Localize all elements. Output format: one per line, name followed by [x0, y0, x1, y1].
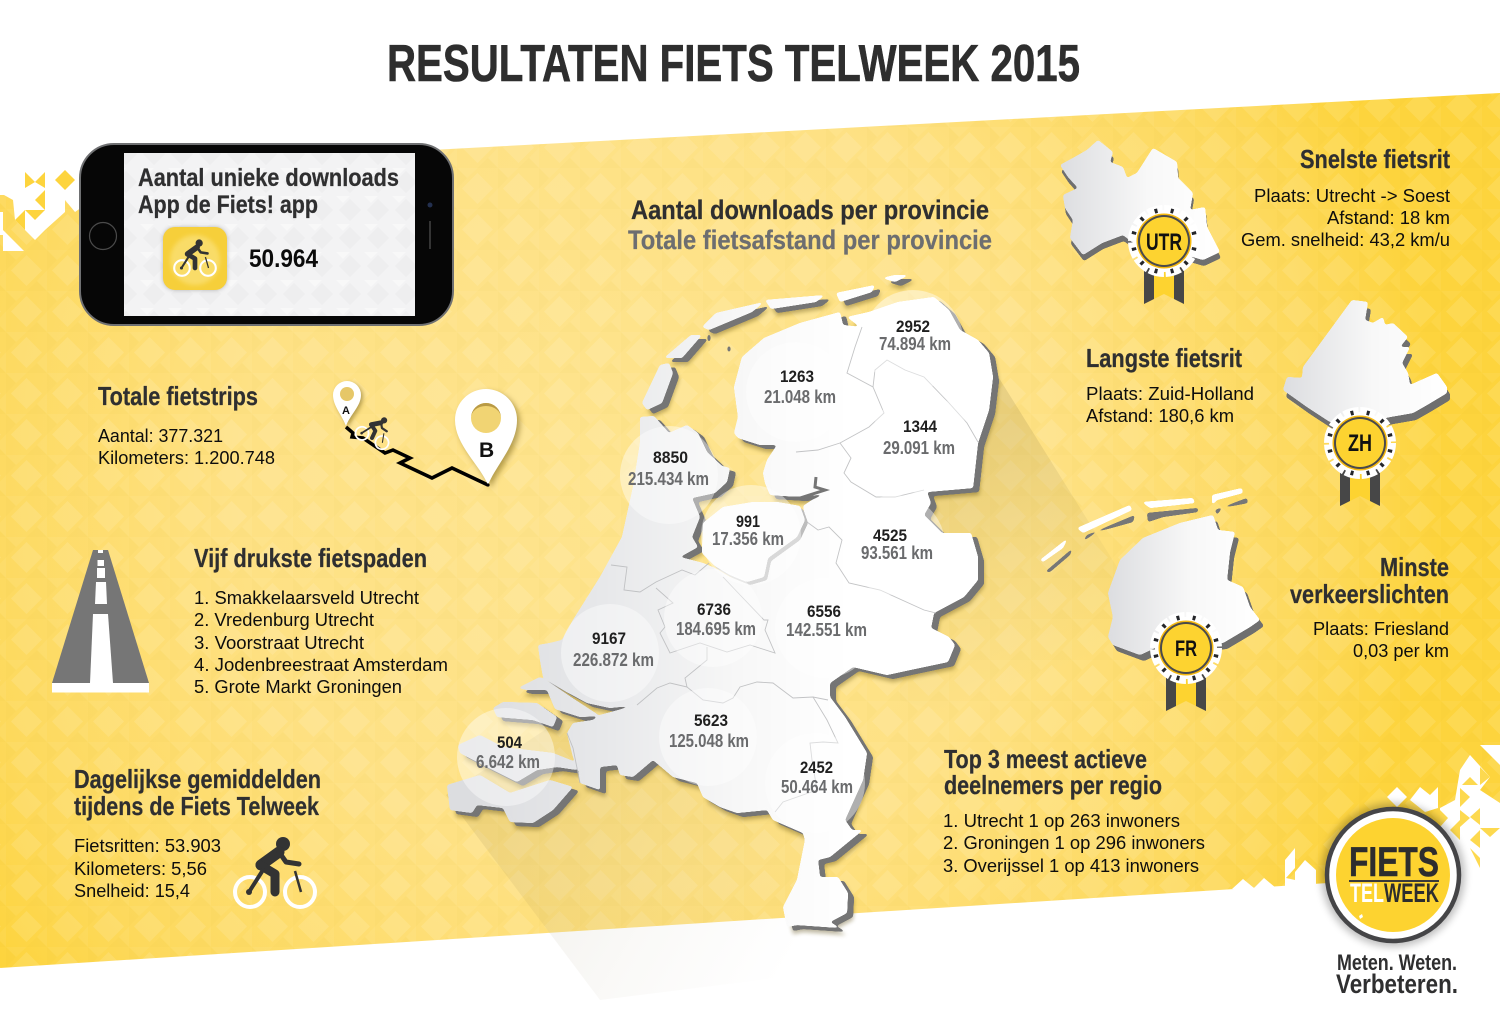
daily averages: Kilometers: 5,56	[74, 859, 207, 879]
phone screen	[124, 153, 415, 316]
route cyclist	[353, 409, 398, 451]
label: Friesland	[764, 367, 836, 407]
busiest cycle paths	[194, 543, 448, 697]
label: Overijssel: 93.561 km	[861, 543, 933, 563]
label: Gelderland: 6556	[807, 602, 841, 621]
map heading: Aantal downloads per provincie	[631, 195, 989, 225]
busiest cycle paths: Vijf drukste fietspaden	[194, 543, 427, 573]
route line	[346, 427, 488, 485]
province borders	[567, 327, 978, 812]
top 3 regions: deelnemers per regio	[944, 770, 1162, 800]
label: Flevoland	[712, 512, 784, 549]
label: Zuid-Holland: 9167	[592, 629, 626, 648]
Utrecht province with rosette: UTR	[1146, 229, 1182, 256]
label: Overijssel	[861, 526, 933, 563]
Zuid-Holland province with rosette	[1283, 300, 1450, 506]
Zuid-Holland province with rosette: ZH	[1348, 430, 1372, 457]
total trips text: Totale fietstrips	[98, 381, 258, 411]
daily averages	[74, 764, 321, 901]
label: Zeeland	[476, 733, 540, 772]
daily averages: Snelheid: 15,4	[74, 881, 190, 901]
pin A: A	[342, 405, 350, 417]
label: Zuid-Holland: 226.872 km	[573, 650, 654, 670]
Friesland province with rosette: FR	[1175, 636, 1197, 661]
label: Noord-Holland	[628, 448, 709, 489]
total trips text	[98, 381, 275, 468]
tagline	[1336, 950, 1458, 999]
label: Gelderland: 142.551 km	[786, 620, 867, 640]
phone panel	[80, 144, 453, 325]
daily averages: Dagelijkse gemiddelden	[74, 764, 321, 794]
map heading	[628, 195, 992, 255]
Fiets Telweek logo	[1321, 803, 1465, 947]
pin B: B	[479, 439, 494, 462]
label: Noord-Brabant: 5623	[694, 711, 728, 730]
top 3 regions: 2. Groningen 1 op 296 inwoners	[943, 833, 1205, 853]
longest ride text: Langste fietsrit	[1086, 343, 1242, 373]
label: Limburg: 50.464 km	[781, 777, 853, 797]
Fiets Telweek logo: FIETS	[1349, 838, 1439, 885]
home button	[90, 222, 116, 250]
icon: cyclist	[235, 837, 315, 907]
pin A	[333, 381, 361, 426]
downloads heading: App de Fiets! app	[138, 191, 318, 219]
triangle decoration left	[0, 165, 85, 251]
label: Zuid-Holland	[573, 629, 654, 670]
fastest ride text: Gem. snelheid: 43,2 km/u	[1241, 230, 1450, 250]
label: Utrecht	[676, 600, 756, 639]
app icon	[163, 227, 227, 290]
top 3 regions: Top 3 meest actieve	[944, 744, 1147, 774]
long map shadow	[446, 370, 1125, 1000]
map heading: Totale fietsafstand per provincie	[628, 225, 992, 255]
label: Noord-Holland: 215.434 km	[628, 469, 709, 489]
label: Drenthe: 1344	[903, 417, 937, 436]
label: Flevoland: 991	[736, 512, 760, 531]
label: Groningen	[879, 317, 951, 354]
road icon	[52, 550, 149, 692]
longest ride text	[1086, 343, 1254, 426]
fastest ride text: Afstand: 18 km	[1327, 208, 1450, 228]
tagline: Meten. Weten.	[1337, 950, 1457, 975]
label: Noord-Brabant: 125.048 km	[669, 731, 749, 751]
least traffic lights text: Plaats: Friesland	[1313, 619, 1449, 639]
triangle decoration bottom right	[1232, 745, 1500, 900]
label: Friesland: 1263	[780, 367, 814, 386]
least traffic lights text	[1290, 552, 1449, 661]
label: Drenthe: 29.091 km	[883, 438, 955, 458]
Utrecht province with rosette	[1060, 140, 1221, 304]
label: Limburg: 2452	[800, 758, 833, 777]
label: Utrecht: 6736	[697, 600, 731, 619]
label: Gelderland	[786, 602, 867, 640]
daily averages: Fietsritten: 53.903	[74, 836, 221, 856]
fastest ride text: Snelste fietsrit	[1300, 144, 1450, 174]
label: Utrecht: 184.695 km	[676, 619, 756, 639]
label: Drenthe	[883, 417, 955, 458]
longest ride text: Plaats: Zuid-Holland	[1086, 384, 1254, 404]
label: Groningen: 74.894 km	[879, 334, 951, 354]
title: RESULTATEN FIETS TELWEEK 2015	[387, 35, 1080, 93]
phone body	[80, 144, 453, 325]
label: Limburg	[781, 758, 853, 797]
busiest cycle paths: 4. Jodenbreestraat Amsterdam	[194, 655, 448, 675]
least traffic lights text: 0,03 per km	[1353, 641, 1449, 661]
province circles	[457, 290, 970, 833]
busiest cycle paths: 2. Vredenburg Utrecht	[194, 610, 374, 630]
top 3 regions: 1. Utrecht 1 op 263 inwoners	[943, 811, 1180, 831]
label: Noord-Brabant	[669, 711, 749, 751]
label: Noord-Holland: 8850	[653, 448, 688, 467]
downloads heading	[138, 164, 399, 219]
top 3 regions	[943, 744, 1205, 876]
busiest cycle paths: 3. Voorstraat Utrecht	[194, 633, 364, 653]
label: Groningen: 2952	[896, 317, 930, 336]
least traffic lights text: Minste	[1380, 552, 1449, 582]
fastest ride text: Plaats: Utrecht -> Soest	[1254, 186, 1450, 206]
busiest cycle paths: 5. Grote Markt Groningen	[194, 677, 402, 697]
Friesland province with rosette	[1040, 488, 1264, 711]
downloads number: 50.964	[249, 245, 318, 273]
map of the Netherlands	[447, 275, 999, 935]
Fiets Telweek logo: TEL	[1350, 878, 1384, 908]
total trips text: Aantal: 377.321	[98, 426, 223, 446]
label: Overijssel: 4525	[873, 526, 907, 545]
pin B	[455, 389, 517, 485]
tagline: Verbeteren.	[1336, 969, 1458, 999]
top 3 regions: 3. Overijssel 1 op 413 inwoners	[943, 856, 1199, 876]
longest ride text: Afstand: 180,6 km	[1086, 406, 1234, 426]
busiest cycle paths: 1. Smakkelaarsveld Utrecht	[194, 588, 419, 608]
Fiets Telweek logo: WEEK	[1384, 878, 1439, 908]
daily averages: tijdens de Fiets Telweek	[74, 791, 319, 821]
label: Flevoland: 17.356 km	[712, 529, 784, 549]
total trips text: Kilometers: 1.200.748	[98, 448, 275, 468]
camera and speaker	[428, 202, 432, 249]
label: Friesland: 21.048 km	[764, 387, 836, 407]
fastest ride text	[1241, 144, 1450, 250]
least traffic lights text: verkeerslichten	[1290, 579, 1449, 609]
downloads heading: Aantal unieke downloads	[138, 164, 399, 192]
label: Zeeland: 6.642 km	[476, 752, 540, 772]
route with pins	[333, 381, 517, 487]
label: Zeeland: 504	[497, 733, 522, 752]
